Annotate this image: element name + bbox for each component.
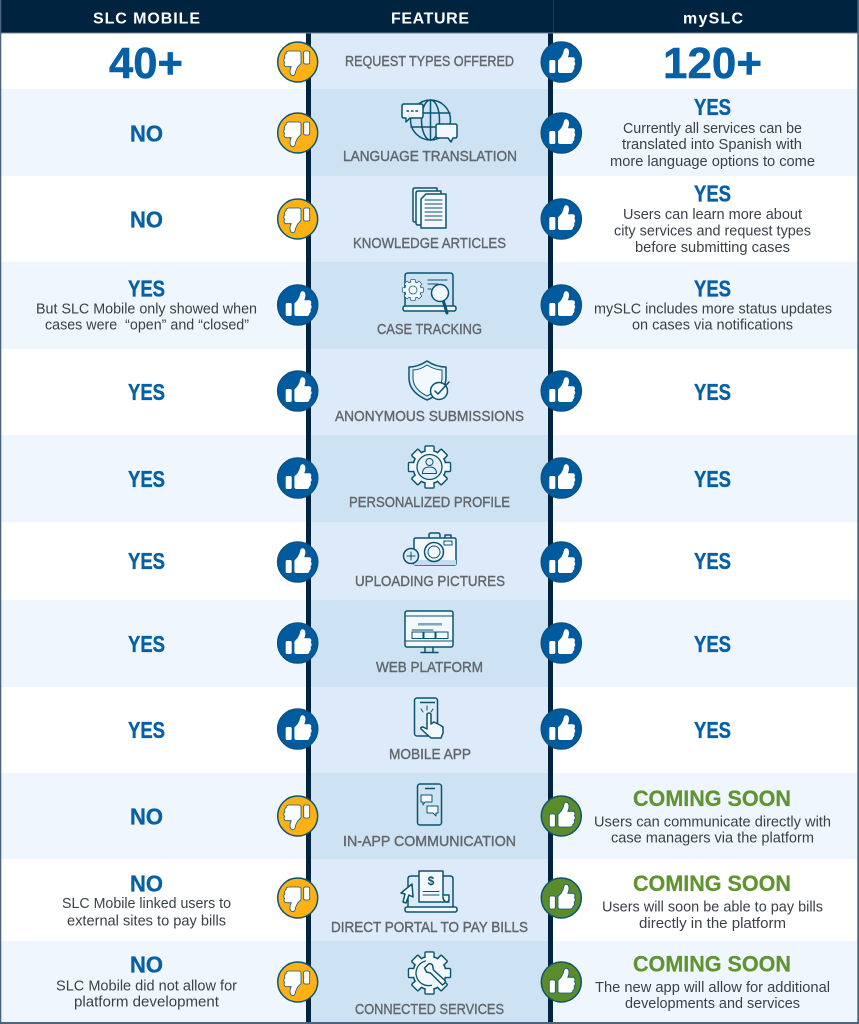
icon: thumbs up	[277, 371, 318, 411]
icon: thumbs up	[541, 796, 581, 836]
value: no, direct portal	[62, 871, 231, 930]
value: 40+: 40+	[109, 39, 183, 88]
value: no, connected services: platform development	[74, 994, 220, 1011]
value: yes, case tracking	[594, 276, 832, 334]
icon: thumbs up	[541, 113, 582, 153]
value: coming soon, in-app communication	[594, 786, 831, 847]
value: yes, web platform: YES	[128, 631, 165, 657]
icon: gear with wrench	[408, 952, 450, 994]
icon: thumbs up	[541, 199, 582, 239]
value: yes, knowledge articles: city services and request types	[614, 222, 811, 240]
value: no, direct portal: NO	[130, 871, 163, 897]
feature label: language translation: LANGUAGE TRANSLATION	[343, 149, 517, 165]
value: yes, web platform: YES	[694, 631, 731, 657]
heading: SLC MOBILE: SLC MOBILE	[93, 10, 200, 27]
value: coming soon, in-app communication: COMING SOON	[633, 786, 791, 811]
value: coming soon, direct portal: Users will soon be able to pay bills	[602, 898, 823, 916]
icon: thumbs up	[541, 371, 582, 411]
icon: thumbs up	[541, 623, 582, 663]
icon: thumbs up	[541, 42, 582, 82]
icon: globe with speech bubbles	[402, 100, 457, 142]
icon: thumbs up	[277, 709, 318, 749]
value: coming soon, direct portal: COMING SOON	[633, 871, 791, 896]
icon: thumbs down	[278, 962, 318, 1002]
feature label: connected services: CONNECTED SERVICES	[355, 1002, 504, 1018]
icon: stacked documents	[413, 188, 446, 228]
panel: SLC MOBILE column	[0, 33, 318, 1022]
value: no, connected services: NO	[130, 952, 163, 978]
icon: thumbs up	[541, 878, 581, 918]
icon: gear with user profile	[408, 446, 450, 488]
icon: laptop with bill and cursor: $	[428, 874, 435, 888]
value: yes, case tracking: on cases via notifications	[632, 317, 793, 334]
value: coming soon, connected services: COMING SOON	[633, 952, 791, 977]
value: yes, language translation: more language options to come	[610, 153, 815, 170]
value: yes, personalized profile: YES	[694, 466, 731, 492]
feature label: request types offered: REQUEST TYPES OFFERED	[345, 54, 514, 70]
value: no, knowledge articles: NO	[130, 207, 163, 233]
icon: laptop with bill and cursor	[401, 871, 457, 912]
icon: thumbs down	[278, 42, 318, 82]
value: 120+: 120+	[663, 39, 762, 88]
icon: web platform monitor	[405, 611, 453, 652]
value: coming soon, in-app communication: Users can communicate directly with	[594, 814, 831, 830]
value: yes, knowledge articles: before submitting cases	[635, 239, 790, 256]
value: coming soon, in-app communication: case managers via the platform	[611, 830, 814, 847]
value: no, connected services	[56, 952, 237, 1011]
value: yes, knowledge articles	[614, 181, 811, 256]
value: no, direct portal: SLC Mobile linked users to	[62, 895, 231, 912]
icon: thumbs up	[541, 285, 582, 325]
feature label: anonymous submissions: ANONYMOUS SUBMISSIONS	[335, 409, 524, 425]
value: yes, case tracking	[36, 276, 257, 334]
value: yes, mobile app: YES	[128, 717, 165, 743]
icon: phone with chat bubbles	[418, 784, 442, 825]
icon: thumbs down	[278, 878, 318, 918]
value: yes, personalized profile: YES	[128, 466, 165, 492]
value: yes, anonymous submissions: YES	[128, 379, 165, 405]
icon: thumbs up	[277, 285, 318, 325]
panel: FEATURE column	[306, 33, 553, 1022]
value: yes, language translation: Currently all services can be	[623, 120, 802, 137]
value: yes, case tracking: mySLC includes more status updates	[594, 301, 832, 318]
panel: mySLC column	[541, 33, 859, 1022]
icon: thumbs up	[541, 709, 582, 749]
value: coming soon, connected services	[595, 952, 830, 1012]
value: coming soon, direct portal	[602, 871, 823, 932]
value: yes, case tracking: YES	[694, 276, 731, 302]
icon: phone with tapping hand	[414, 698, 443, 738]
value: yes, uploading pictures: YES	[694, 548, 731, 574]
value: coming soon, connected services: developments and services	[625, 995, 800, 1012]
icon: laptop with gear and magnifier	[402, 273, 456, 313]
header bar	[0, 0, 859, 34]
icon: thumbs down	[278, 199, 318, 239]
icon: thumbs up	[541, 962, 581, 1002]
icon: thumbs up	[541, 542, 582, 582]
value: yes, uploading pictures: YES	[128, 548, 165, 574]
value: no, connected services: SLC Mobile did not allow for	[56, 978, 237, 995]
heading: FEATURE: FEATURE	[391, 10, 469, 27]
value: no, language translation: NO	[130, 121, 163, 147]
value: yes, anonymous submissions: YES	[694, 379, 731, 405]
feature label: web platform: WEB PLATFORM	[376, 660, 483, 676]
icon: thumbs up	[277, 542, 318, 582]
icon: thumbs up	[277, 458, 318, 498]
icon: thumbs up	[541, 458, 582, 498]
value: no, direct portal: external sites to pay bills	[67, 912, 226, 930]
heading: mySLC: mySLC	[683, 10, 743, 27]
value: yes, language translation: YES	[694, 94, 731, 120]
feature label: direct portal to pay bills: DIRECT PORTAL TO PAY BILLS	[331, 920, 528, 936]
value: yes, knowledge articles: YES	[694, 181, 731, 207]
value: no, in-app communication: NO	[130, 804, 163, 830]
value: yes, mobile app: YES	[694, 717, 731, 743]
value: yes, knowledge articles: Users can learn more about	[623, 206, 803, 223]
feature label: personalized profile: PERSONALIZED PROFILE	[349, 495, 510, 511]
icon: thumbs down	[278, 796, 318, 836]
icon: camera with plus	[404, 533, 456, 565]
feature label: in-app communication: IN-APP COMMUNICATION	[343, 834, 516, 850]
value: coming soon, connected services: The new app will allow for additional	[595, 979, 830, 996]
value: yes, case tracking: But SLC Mobile only showed when	[36, 301, 257, 318]
icon: shield with check	[409, 361, 449, 400]
icon: thumbs down	[278, 113, 318, 153]
value: yes, language translation: translated into Spanish with	[622, 136, 802, 153]
feature label: mobile app: MOBILE APP	[389, 747, 471, 763]
value: yes, case tracking: YES	[128, 276, 165, 302]
feature label: knowledge articles: KNOWLEDGE ARTICLES	[353, 236, 506, 252]
value: yes, case tracking: cases were “open” and “closed”	[45, 317, 249, 334]
feature label: case tracking: CASE TRACKING	[377, 322, 482, 338]
feature label: uploading pictures: UPLOADING PICTURES	[355, 574, 505, 590]
icon: thumbs up	[277, 623, 318, 663]
value: yes, language translation	[610, 94, 815, 170]
value: coming soon, direct portal: directly in the platform	[639, 915, 786, 932]
